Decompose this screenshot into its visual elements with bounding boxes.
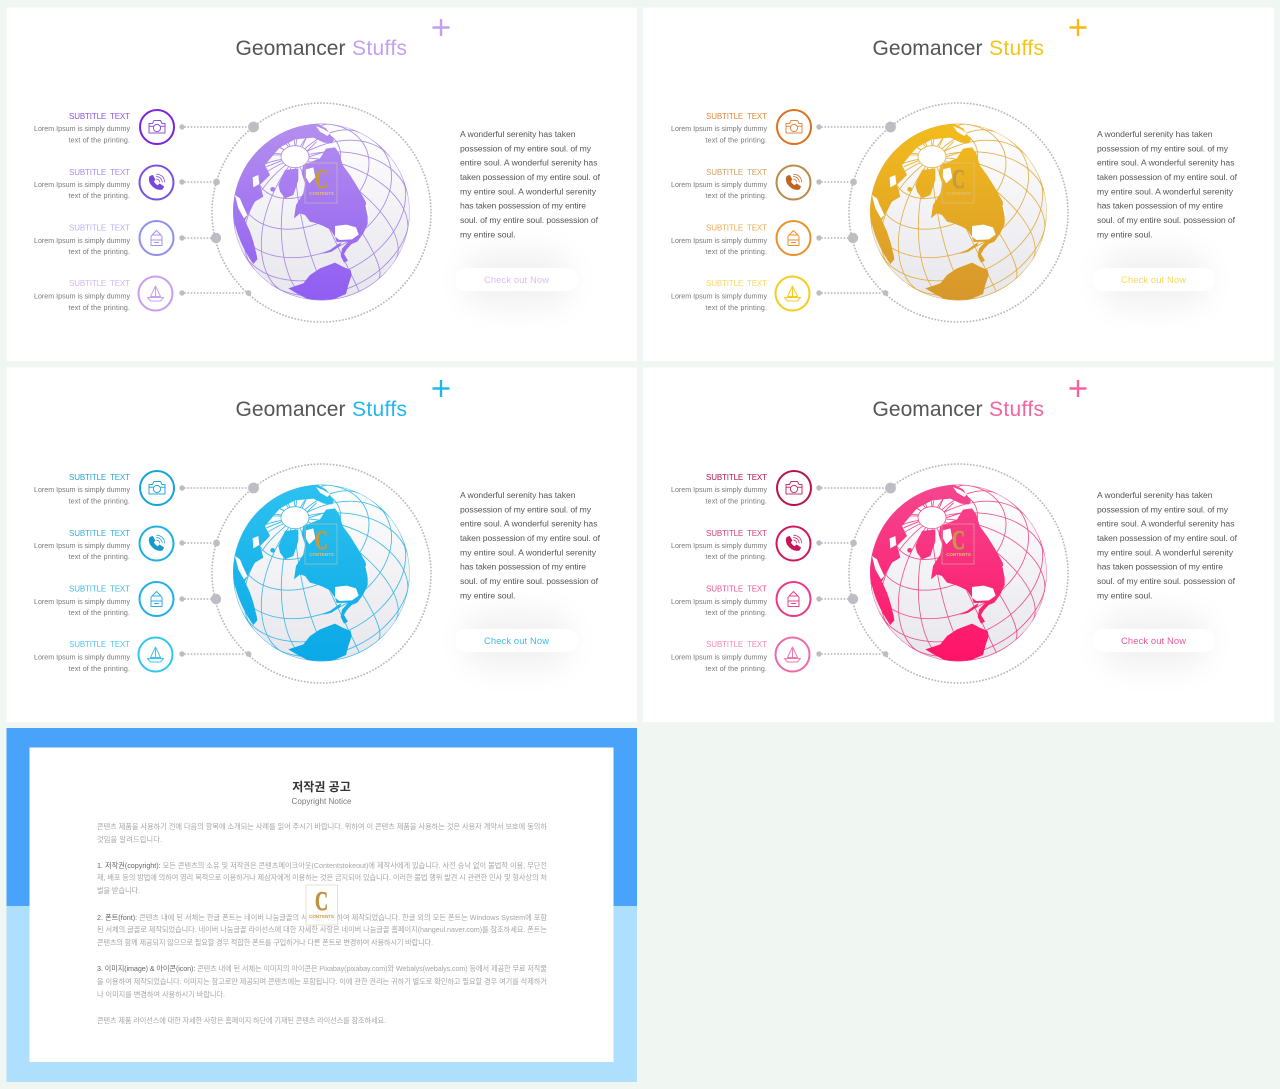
list: subtitle items: SUBTITLE TEXT (706, 112, 767, 121)
list: subtitle items: SUBTITLE TEXT (706, 224, 767, 232)
body text: soul. of my entire soul. possession of (460, 576, 599, 586)
body text: A wonderful serenity has taken (1097, 490, 1213, 500)
body text: my entire soul. A wonderful serenity (460, 186, 597, 196)
list: subtitle items: SUBTITLE TEXT (69, 529, 130, 538)
panel: purple globe slide (6, 8, 637, 361)
body text: possession of my entire soul. of my (460, 504, 592, 514)
body text: possession of my entire soul. of my (460, 143, 592, 153)
list: subtitle items: SUBTITLE TEXT (706, 168, 767, 177)
logo watermark: purple slide: C (315, 164, 328, 194)
list: subtitle items: Lorem Ipsum is simply dummy (34, 125, 130, 133)
list: subtitle items: Lorem Ipsum is simply dummy (34, 181, 130, 189)
logo watermark on notice: C (315, 886, 328, 916)
notice body (97, 822, 547, 1025)
list: subtitle items: SUBTITLE TEXT (706, 529, 767, 538)
list: subtitle items: SUBTITLE TEXT (706, 473, 767, 482)
connector dots (179, 483, 259, 657)
list: subtitle items: text of the printing. (706, 665, 767, 673)
body text: possession of my entire soul. of my (1097, 143, 1229, 153)
list: subtitle items: Lorem Ipsum is simply dummy (671, 598, 767, 606)
body text: my entire soul. A wonderful serenity (460, 547, 597, 557)
list: subtitle items: Lorem Ipsum is simply dummy (671, 654, 767, 662)
list: subtitle items: text of the printing. (68, 304, 130, 312)
list: subtitle items: Lorem Ipsum is simply dummy (34, 598, 130, 606)
title: Stuffs (989, 37, 1044, 60)
list: subtitle items: text of the printing. (68, 609, 130, 617)
body text: entire soul. A wonderful serenity has (460, 158, 598, 168)
icon: plus (1070, 380, 1086, 397)
panel: gold globe slide (643, 8, 1274, 361)
list: subtitle items: text of the printing. (68, 498, 130, 506)
notice body: 재, 배포 등의 방법에 의하여 영리 목적으로 이용하거나 제삼자에게 이용하는 것은 금지되어 있습니다. 이러한 불법 행위 발견 시 관련한 민사 및 형사상의 처 (97, 873, 547, 882)
list: subtitle items: SUBTITLE TEXT (69, 112, 130, 121)
panel: blue globe slide (6, 368, 637, 722)
globe with dotted orbit (849, 103, 1068, 322)
notice body: 된 서체의 글꼴로 제작되었습니다. 네이버 나눔글꼴 라이선스에 대한 자세한 사항은 네이버 나눔글꼴 홈페이지(hangeul.naver.com)를 참조하세요. 폰트는 (97, 925, 547, 934)
notice body: 콘텐츠 제품을 사용하기 전에 다음의 항목에 소개되는 사례를 읽어 주시기 바랍니다. 위하여 이 콘텐츠 제품을 사용하는 것은 사용자 계약서 보호에 동의하 (97, 822, 547, 831)
button (1092, 613, 1215, 668)
list: subtitle items: text of the printing. (68, 192, 130, 200)
logo watermark: gold slide: CONTENTS (946, 191, 971, 196)
title: Stuffs (989, 398, 1044, 421)
body text: entire soul. A wonderful serenity has (1097, 519, 1234, 529)
body text: has taken possession of my entire (460, 201, 586, 211)
list: subtitle items: text of the printing. (68, 553, 130, 561)
list: subtitle items: SUBTITLE TEXT (69, 473, 130, 482)
body text: taken possession of my entire soul. of (460, 533, 601, 543)
body text: my entire soul. (460, 590, 516, 600)
logo watermark: blue slide: CONTENTS (309, 552, 334, 557)
logo watermark: pink slide: CONTENTS (946, 552, 971, 557)
button: Check out Now (484, 635, 549, 646)
globe with dotted orbit (212, 103, 431, 322)
body text: possession of my entire soul. of my (1097, 504, 1229, 514)
list: subtitle items: Lorem Ipsum is simply dummy (671, 292, 767, 300)
list: subtitle items (34, 110, 174, 312)
list: subtitle items: SUBTITLE TEXT (706, 640, 767, 649)
logo watermark on notice: CONTENTS (309, 914, 334, 919)
list: subtitle items (671, 471, 811, 673)
title: Geomancer (236, 37, 346, 60)
list: subtitle items: SUBTITLE TEXT (706, 279, 767, 288)
notice body: 벌을 받습니다. (97, 886, 140, 895)
list: subtitle items: SUBTITLE TEXT (69, 640, 130, 649)
body text: my entire soul. (1097, 229, 1152, 239)
notice body: 1. 저작권(copyright): 모든 콘텐츠의 소유 및 저작권은 콘텐츠메이크아웃(Contentstokeout)에 제작사에게 있습니다. 사전 승낙 없이 불법적 이용, 무단전 (97, 861, 547, 870)
list: subtitle items: SUBTITLE TEXT (69, 168, 130, 177)
list: subtitle items: Lorem Ipsum is simply dummy (34, 237, 130, 245)
body text: has taken possession of my entire (1097, 562, 1223, 572)
list: subtitle items: Lorem Ipsum is simply dummy (671, 486, 767, 494)
logo watermark: purple slide: CONTENTS (309, 191, 334, 196)
body text: my entire soul. (1097, 590, 1152, 600)
body text: soul. of my entire soul. possession of (1097, 215, 1236, 225)
notice body: 콘텐츠 제품 라이선스에 대한 자세한 사항은 홈페이지 하단에 기재된 콘텐츠 라이선스를 참조하세요. (97, 1016, 386, 1025)
panel: copyright notice (6, 728, 637, 1082)
button: Check out Now (1121, 274, 1186, 285)
notice body: 콘텐츠의 함께 제공되지 않으므로 필요할 경우 적합한 폰트를 구입하거나 다른 폰트로 변경하여 사용하시기 바랍니다. (97, 938, 433, 947)
body text: soul. of my entire soul. possession of (1097, 576, 1236, 586)
notice body: 2. 폰트(font): 콘텐츠 내에 된 서체는 한글 폰트는 네이버 나눔글꼴의 서체를 이용하여 제작되었습니다. 한글 외의 모든 폰트는 Windows System에 포함 (97, 913, 547, 922)
notice body: 것임을 알려드립니다. (97, 835, 162, 844)
list: subtitle items: text of the printing. (706, 609, 767, 617)
body text: A wonderful serenity has taken (460, 129, 576, 139)
button (455, 613, 578, 668)
list: subtitle items: SUBTITLE TEXT (69, 224, 130, 232)
title: Geomancer (872, 37, 982, 60)
list: subtitle items: text of the printing. (706, 498, 767, 506)
list: subtitle items: text of the printing. (706, 248, 767, 256)
body text: soul. of my entire soul. possession of (460, 215, 599, 225)
list: subtitle items: Lorem Ipsum is simply dummy (34, 542, 130, 550)
list: subtitle items: SUBTITLE TEXT (69, 279, 130, 288)
list: subtitle items: text of the printing. (706, 136, 767, 144)
body text: my entire soul. A wonderful serenity (1097, 186, 1234, 196)
notice body: 3. 이미지(image) & 아이콘(icon): 콘텐츠 내에 된 서체는 이미지의 아이콘은 Pixabay(pixabay.com)와 Webalys(webalys.com) 등에서 제공한 무료 저작물 (97, 964, 547, 973)
globe with dotted orbit (849, 464, 1068, 683)
list: subtitle items: Lorem Ipsum is simply dummy (671, 125, 767, 133)
logo watermark on notice (306, 885, 338, 925)
logo watermark: purple slide (305, 163, 337, 203)
connector dots (179, 122, 259, 296)
globe with dotted orbit (212, 464, 431, 683)
body text: entire soul. A wonderful serenity has (460, 519, 598, 529)
title: Geomancer (872, 398, 982, 421)
body text: has taken possession of my entire (460, 562, 586, 572)
button: Check out Now (1121, 635, 1186, 646)
list: subtitle items: text of the printing. (706, 553, 767, 561)
notice subheading: Copyright Notice (292, 797, 352, 806)
title: Stuffs (352, 37, 407, 60)
logo watermark: blue slide (305, 524, 337, 564)
title: Stuffs (352, 398, 407, 421)
button (455, 252, 578, 307)
body text: my entire soul. (460, 229, 516, 239)
logo watermark: gold slide (942, 163, 974, 203)
list: subtitle items: Lorem Ipsum is simply dummy (671, 181, 767, 189)
icon: plus (1070, 19, 1086, 36)
button (1092, 252, 1215, 307)
list: subtitle items: Lorem Ipsum is simply dummy (671, 237, 767, 245)
button: Check out Now (484, 274, 549, 285)
logo watermark: blue slide: C (315, 525, 328, 555)
list: subtitle items: text of the printing. (68, 136, 130, 144)
body text: entire soul. A wonderful serenity has (1097, 158, 1234, 168)
notice heading: 저작권 공고 (292, 779, 351, 794)
connector dots (816, 483, 896, 657)
body text: taken possession of my entire soul. of (1097, 172, 1238, 182)
body text: A wonderful serenity has taken (1097, 129, 1213, 139)
list: subtitle items: text of the printing. (68, 665, 130, 673)
logo watermark: gold slide: C (952, 164, 965, 194)
icon: plus (432, 380, 450, 397)
body text: my entire soul. A wonderful serenity (1097, 547, 1234, 557)
list: subtitle items: Lorem Ipsum is simply dummy (34, 292, 130, 300)
list: subtitle items: SUBTITLE TEXT (69, 584, 130, 594)
icon: plus (432, 19, 450, 36)
body text: A wonderful serenity has taken (460, 490, 576, 500)
list: subtitle items: text of the printing. (68, 248, 130, 256)
title: Geomancer (236, 398, 346, 421)
panel: pink globe slide (643, 368, 1274, 722)
list: subtitle items: Lorem Ipsum is simply dummy (34, 654, 130, 662)
notice body: 을 이용하여 제작되었습니다. 이미지는 참고로만 제공되며 콘텐츠에는 포함됩니다. 이에 관한 권리는 귀하기 별도로 확인하고 필요할 경우 여기를 삭제하거 (97, 977, 547, 986)
logo watermark: pink slide: C (952, 525, 965, 555)
list: subtitle items (671, 110, 811, 312)
logo watermark: pink slide (942, 524, 974, 564)
connector dots (816, 122, 896, 296)
list: subtitle items: SUBTITLE TEXT (706, 584, 767, 594)
body text: taken possession of my entire soul. of (460, 172, 601, 182)
list: subtitle items (34, 471, 174, 673)
list: subtitle items: text of the printing. (706, 192, 767, 200)
list: subtitle items: Lorem Ipsum is simply dummy (34, 486, 130, 494)
body text: has taken possession of my entire (1097, 201, 1223, 211)
notice body: 나 이미지를 변경하여 사용하시기 바랍니다. (97, 990, 225, 999)
list: subtitle items: text of the printing. (706, 304, 767, 312)
list: subtitle items: Lorem Ipsum is simply dummy (671, 542, 767, 550)
body text: taken possession of my entire soul. of (1097, 533, 1238, 543)
